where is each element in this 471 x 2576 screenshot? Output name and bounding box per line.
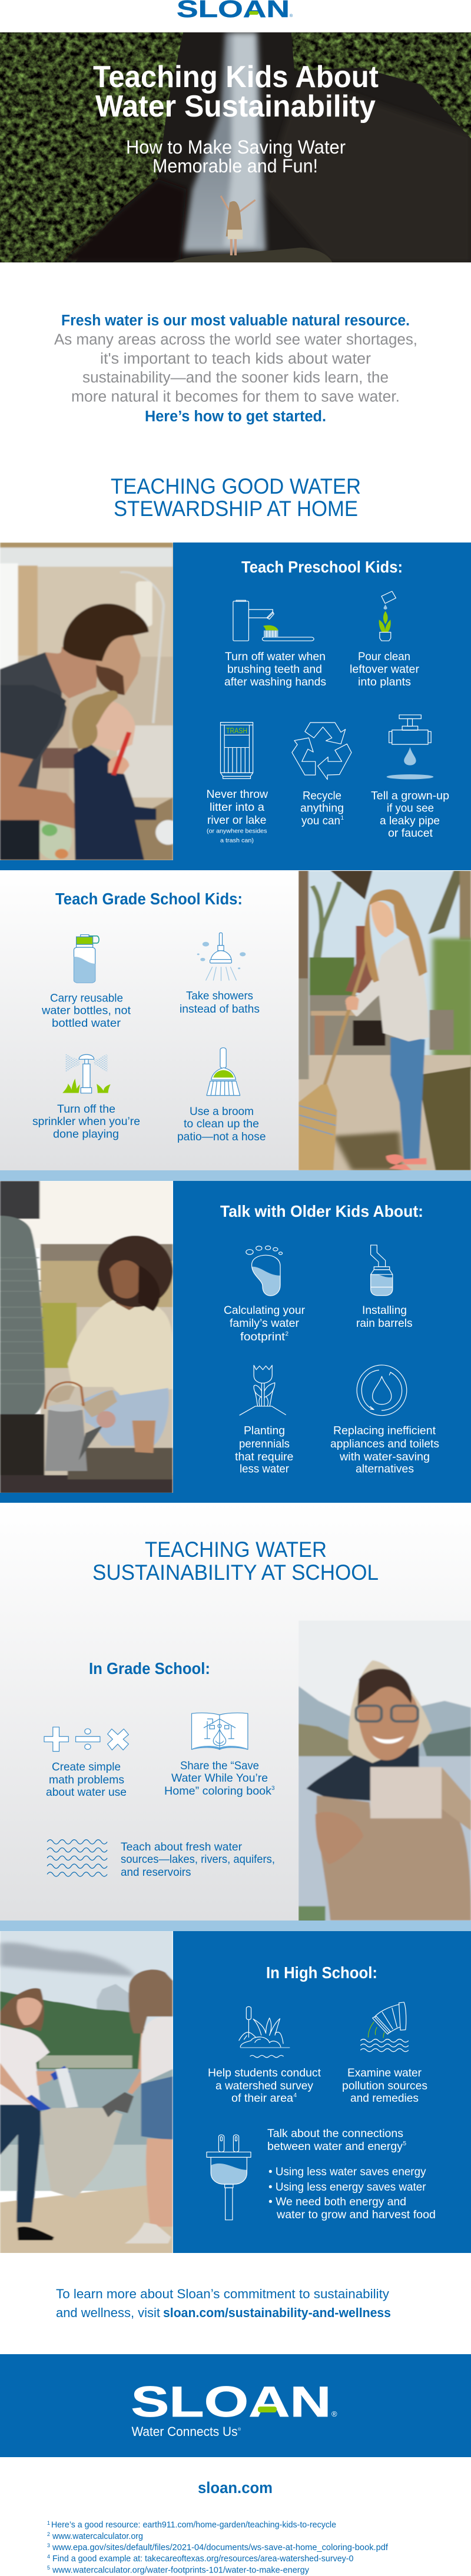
photo: teens cleaning up a beach xyxy=(0,1931,173,2254)
text: never throw litter: river or lake xyxy=(207,814,266,827)
strip under older kids panel xyxy=(0,1493,471,1503)
text: take showers: Take showers xyxy=(186,990,253,1003)
text: teach about fresh water sources: Teach about fresh water xyxy=(121,1841,242,1853)
text: use a broom: to clean up the xyxy=(184,1117,259,1130)
text: create simple math problems: math problems xyxy=(49,1773,124,1786)
text: tell a grown-up: if you see xyxy=(387,801,434,814)
text: calculating footprint: 2 xyxy=(285,1331,288,1337)
text: share the coloring book: Water While You’re xyxy=(171,1772,268,1785)
icon: coloring book xyxy=(192,1713,248,1749)
text: planting perennials: that require xyxy=(235,1450,293,1463)
text: use a broom xyxy=(177,1105,266,1143)
strip under preschool panel xyxy=(0,860,471,870)
logo: Sloan wordmark: SLOAN xyxy=(131,2378,331,2426)
text: turn off sprinkler xyxy=(32,1103,140,1140)
text: recycle: Recycle xyxy=(303,790,341,803)
text: connections between water and energy: Talk about the connections xyxy=(267,2127,403,2140)
text: calculating footprint: footprint xyxy=(240,1330,286,1343)
heading: stewardship at home: TEACHING GOOD WATER xyxy=(111,474,361,498)
icon: rain barrel xyxy=(371,1245,393,1296)
text: recycle xyxy=(300,790,344,827)
text: tell a grown-up: a leaky pipe xyxy=(380,814,440,827)
text: help students conduct survey: a watershed survey xyxy=(215,2079,313,2092)
text: replacing appliances: with water-saving xyxy=(339,1450,430,1463)
panel: preschool kids xyxy=(0,543,471,870)
text: turn off sprinkler: Turn off the xyxy=(57,1103,115,1116)
text: help students conduct survey: of their area xyxy=(231,2092,293,2105)
text: calculating footprint: Calculating your xyxy=(224,1304,305,1317)
icon: electric plug with water xyxy=(207,2135,251,2220)
text: teach about fresh water sources: and reservoirs xyxy=(121,1866,191,1879)
strip under grade school (at school) panel xyxy=(0,1921,471,1931)
heading: teach grade school kids: Teach Grade School Kids: xyxy=(55,890,243,908)
text: connections between water and energy: between water and energy xyxy=(267,2140,403,2153)
text: calculating footprint: family’s water xyxy=(230,1317,299,1330)
icon: waves xyxy=(47,1840,107,1876)
text: pour clean water: leftover water xyxy=(350,663,419,675)
text: examine water pollution: Examine water xyxy=(347,2066,422,2079)
text: connections between water and energy: • Using less water saves energy xyxy=(268,2165,426,2178)
text: installing rain barrels xyxy=(356,1304,413,1330)
text: turn off water: Turn off water when xyxy=(225,650,326,663)
text: never throw litter xyxy=(206,788,268,844)
footnotes xyxy=(47,2520,389,2575)
text: share the coloring book: 3 xyxy=(271,1785,275,1792)
text: installing rain barrels: rain barrels xyxy=(356,1317,413,1330)
text: take showers xyxy=(180,990,260,1016)
text: pour clean water xyxy=(350,650,419,688)
footnotes: www.watercalculator.org xyxy=(52,2532,143,2541)
text: turn off sprinkler: done playing xyxy=(53,1127,119,1140)
icon: math symbols xyxy=(44,1727,128,1751)
text: use a broom: patio—not a hose xyxy=(177,1130,266,1143)
text: tell a grown-up: or faucet xyxy=(388,827,433,840)
photo: father and child brushing teeth xyxy=(0,543,181,861)
hero subtitle: Memorable and Fun! xyxy=(152,155,318,177)
text: tell a grown-up: Tell a grown-up xyxy=(371,790,449,803)
text: carry reusable bottles: bottled water xyxy=(52,1017,121,1030)
heading: teaching water sustainability at school: SUSTAINABILITY AT SCHOOL xyxy=(92,1560,379,1585)
heading: talk with older kids: Talk with Older Kids About: xyxy=(220,1202,423,1220)
text: create simple math problems: about water use xyxy=(46,1786,127,1799)
text: help students conduct survey xyxy=(208,2066,321,2105)
text: connections between water and energy xyxy=(267,2127,436,2221)
footnotes: 4 xyxy=(47,2554,50,2560)
footnotes: 5 xyxy=(47,2565,50,2571)
photo: smiling boy holding a book xyxy=(298,1620,471,1922)
icon: water-saving cycle xyxy=(357,1365,407,1416)
text: turn off sprinkler: sprinkler when you’re xyxy=(32,1115,140,1128)
text: share the coloring book: Home” coloring book xyxy=(164,1785,271,1798)
panel: older kids xyxy=(0,1181,471,1503)
text: installing rain barrels: Installing xyxy=(362,1304,407,1317)
text: planting perennials xyxy=(235,1424,293,1476)
photo: girl sweeping patio xyxy=(298,871,471,1171)
text: pour clean water: into plants xyxy=(358,675,411,688)
text: share the coloring book: Share the “Save xyxy=(180,1759,259,1772)
panel: water sustainability at school xyxy=(0,1503,471,1931)
text: turn off water: brushing teeth and xyxy=(227,663,322,675)
hero photo: child before waterfall xyxy=(0,31,471,264)
tagline: ® xyxy=(238,2427,241,2432)
text: pour clean water: Pour clean xyxy=(358,650,410,663)
closing call to action: To learn more about Sloan’s commitment to sustainability xyxy=(56,2287,389,2301)
icon: leaky valve xyxy=(387,715,433,779)
icon: water footprint xyxy=(246,1246,283,1296)
icon: watershed plants xyxy=(239,2006,290,2058)
text: turn off water xyxy=(224,650,326,688)
text: carry reusable bottles xyxy=(41,992,131,1030)
text: replacing appliances: Replacing inefficient xyxy=(333,1424,436,1437)
icon: trash can xyxy=(220,723,253,778)
hero title: Teaching Kids About xyxy=(93,60,379,94)
heading: in grade school: In Grade School: xyxy=(89,1659,210,1678)
icon: cup pouring water on plant xyxy=(379,591,396,641)
text: carry reusable bottles: Carry reusable xyxy=(50,992,123,1005)
text: replacing appliances: alternatives xyxy=(356,1463,414,1476)
text: tell a grown-up xyxy=(371,790,449,840)
text: examine water pollution: pollution sources xyxy=(342,2079,427,2092)
footnotes: Find a good example at: takecareoftexas.org/resources/area-watershed-survey-0 xyxy=(52,2554,353,2564)
icon: faucet and toothbrush xyxy=(233,600,314,641)
footer logo band xyxy=(0,2354,471,2457)
icon: reusable water bottle xyxy=(74,935,99,983)
hero subtitle: How to Make Saving Water xyxy=(126,137,346,158)
text: replacing appliances: appliances and toilets xyxy=(330,1437,439,1450)
intro text xyxy=(54,312,417,425)
text: replacing appliances xyxy=(330,1424,439,1476)
logo: Sloan wordmark: ® xyxy=(331,2409,337,2418)
closing call to action xyxy=(56,2287,391,2320)
intro text: As many areas across the world see water shortages, xyxy=(54,332,417,348)
text: help students conduct survey: Help students conduct xyxy=(208,2066,321,2079)
text: teach about fresh water sources: sources—lakes, rivers, aquifers, xyxy=(121,1853,275,1866)
heading: in high school: In High School: xyxy=(266,1963,377,1982)
text: create simple math problems xyxy=(46,1760,127,1799)
text: never throw litter: litter into a xyxy=(210,801,264,814)
photo: teen filling watering can at rain barrel xyxy=(0,1181,173,1493)
icon: recycle arrows xyxy=(292,723,351,780)
text: examine water pollution xyxy=(342,2066,427,2105)
intro text: more natural it becomes for them to save water. xyxy=(71,388,400,405)
closing call to action: sloan.com/sustainability-and-wellness xyxy=(163,2305,391,2320)
intro text: sustainability—and the sooner kids learn, the xyxy=(82,370,389,386)
footnotes: 3 xyxy=(47,2542,50,2548)
text: connections between water and energy: 5 xyxy=(403,2141,406,2147)
footnotes: Here’s a good resource: earth911.com/home-garden/teaching-kids-to-recycle xyxy=(51,2521,336,2530)
heading: teach preschool kids: Teach Preschool Kids: xyxy=(241,558,403,576)
tagline: Water Connects Us xyxy=(132,2424,238,2439)
hero subtitle xyxy=(126,137,346,177)
text: planting perennials: Planting xyxy=(244,1424,285,1437)
icon: perennial flower xyxy=(240,1365,286,1415)
intro text: Here’s how to get started. xyxy=(145,408,326,425)
heading: stewardship at home: STEWARDSHIP AT HOME xyxy=(114,497,358,521)
text: never throw litter: a trash can) xyxy=(220,837,254,844)
heading: stewardship at home xyxy=(111,474,361,521)
text: connections between water and energy: • We need both energy and xyxy=(268,2195,406,2208)
icon: polluting outflow pipe xyxy=(360,2002,409,2052)
text: turn off water: after washing hands xyxy=(224,675,326,688)
text: create simple math problems: Create simple xyxy=(52,1760,121,1773)
text: use a broom: Use a broom xyxy=(190,1105,254,1118)
icon: sprinkler xyxy=(62,1054,111,1093)
footnotes: www.epa.gov/sites/default/files/2021-04/documents/ws-save-at-home_coloring-book.pdf xyxy=(52,2543,389,2552)
text: share the coloring book xyxy=(164,1759,275,1798)
text: planting perennials: less water xyxy=(240,1463,289,1476)
panel: high school xyxy=(0,1931,471,2254)
top logo: ® xyxy=(290,14,293,18)
text: examine water pollution: and remedies xyxy=(350,2092,419,2105)
strip under grade school panel xyxy=(0,1170,471,1181)
intro text: it's important to teach kids about water xyxy=(100,351,372,367)
text: recycle: you can xyxy=(301,814,340,827)
hero title xyxy=(93,60,379,124)
intro text: Fresh water is our most valuable natural resource. xyxy=(61,312,410,329)
icon: broom xyxy=(207,1048,240,1096)
hero title: Water Sustainability xyxy=(95,89,376,124)
footnotes: www.watercalculator.org/water-footprints-101/water-to-make-energy xyxy=(52,2565,310,2575)
text: never throw litter: (or anywhere besides xyxy=(207,827,267,834)
closing call to action: and wellness, visit xyxy=(56,2305,160,2320)
text: help students conduct survey: 4 xyxy=(293,2092,297,2099)
text: planting perennials: perennials xyxy=(239,1437,290,1450)
icon: shower head xyxy=(197,933,246,981)
text: take showers: instead of baths xyxy=(180,1003,260,1016)
footnotes: 2 xyxy=(47,2531,50,2537)
website link: sloan.com xyxy=(198,2479,273,2497)
text: calculating footprint xyxy=(224,1304,305,1343)
text: recycle: anything xyxy=(300,801,344,814)
icon: trash can: TRASH xyxy=(226,727,247,735)
panel: grade school kids xyxy=(0,870,471,1181)
footnotes: 1 xyxy=(47,2520,50,2526)
text: connections between water and energy: water to grow and harvest food xyxy=(276,2208,436,2221)
text: never throw litter: Never throw xyxy=(206,788,268,801)
heading: teaching water sustainability at school: TEACHING WATER xyxy=(145,1537,327,1562)
text: recycle: 1 xyxy=(340,815,344,821)
heading: teaching water sustainability at school xyxy=(92,1537,379,1585)
text: connections between water and energy: • Using less energy saves water xyxy=(268,2181,426,2194)
text: teach about fresh water sources xyxy=(121,1841,275,1879)
text: carry reusable bottles: water bottles, not xyxy=(41,1004,131,1017)
